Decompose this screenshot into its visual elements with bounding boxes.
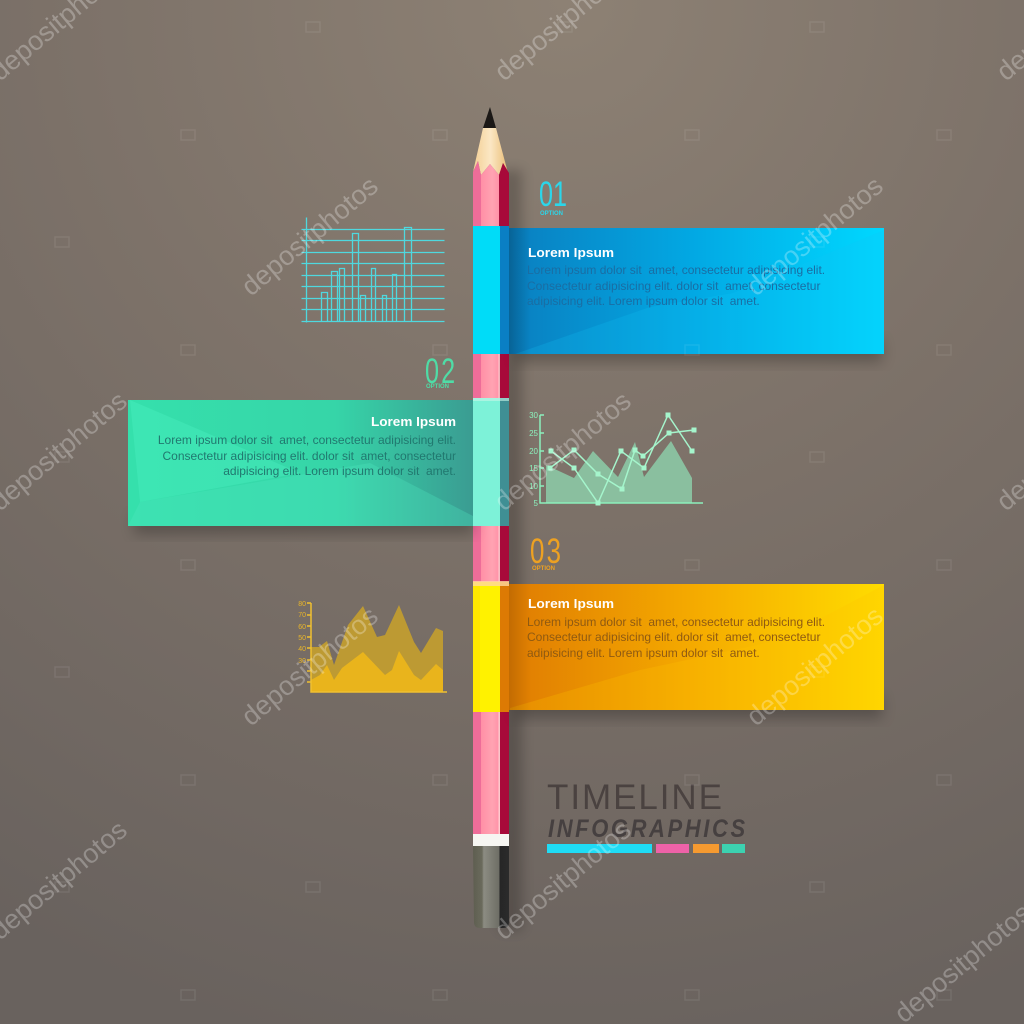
title line 2: INFOGRAPHICS — [548, 815, 745, 842]
line chart axis labels: 10 — [529, 482, 539, 491]
teal body text: Consectetur adipisicing elit. dolor sit amet, consectetur — [163, 449, 456, 463]
yellow band on pencil — [473, 581, 509, 712]
area chart axis labels: 70 — [298, 612, 306, 619]
orange body text — [527, 615, 825, 660]
line chart — [529, 411, 703, 508]
panel: teal — [128, 398, 509, 534]
option 02: 02 — [425, 352, 457, 391]
area chart axis labels: 50 — [298, 635, 306, 642]
bar chart — [302, 218, 444, 322]
line chart axis labels: 30 — [529, 411, 539, 420]
pencil eraser end — [473, 846, 509, 928]
area chart axis labels — [298, 601, 306, 665]
option 03: OPTION — [532, 566, 555, 572]
panel: orange — [473, 581, 884, 718]
area chart axis labels: 60 — [298, 624, 306, 631]
orange body text: Lorem ipsum dolor sit amet, consectetur adipisicing elit. — [527, 615, 825, 629]
teal body text: adipisicing elit. Lorem ipsum dolor sit amet. — [223, 464, 456, 478]
title colour bars — [547, 844, 745, 853]
teal heading: Lorem Ipsum — [371, 414, 456, 429]
line chart axis labels — [529, 411, 539, 508]
area chart axis labels: 40 — [298, 646, 306, 653]
pencil wood — [473, 128, 508, 175]
line chart axis labels: 25 — [529, 429, 539, 438]
blue band on pencil — [473, 226, 509, 354]
orange body text: Consectetur adipisicing elit. dolor sit amet, consectetur — [527, 630, 820, 644]
blue body text: Consectetur adipisicing elit. dolor sit amet, consectetur — [527, 279, 820, 293]
option 01: 01 — [539, 175, 567, 214]
orange heading: Lorem Ipsum — [528, 596, 614, 611]
watermarks: depositphotos — [741, 601, 889, 732]
pencil white ferrule — [473, 834, 509, 846]
orange body text: adipisicing elit. Lorem ipsum dolor sit amet. — [527, 646, 760, 660]
line chart axis labels: 15 — [529, 464, 539, 473]
pencil body — [473, 161, 509, 834]
option 02: OPTION — [426, 384, 449, 390]
watermarks: depositphotos — [741, 171, 889, 302]
watermarks: depositphotos — [489, 815, 637, 946]
area chart axis labels: 80 — [298, 601, 306, 608]
area chart — [298, 601, 447, 692]
option 01: OPTION — [540, 211, 563, 217]
blue body text: adipisicing elit. Lorem ipsum dolor sit amet. — [527, 294, 760, 308]
title line 1: TIMELINE — [547, 778, 722, 817]
blue body text: Lorem ipsum dolor sit amet, consectetur adipisicing elit. — [527, 263, 825, 277]
pencil shadow — [500, 170, 522, 930]
watermarks: depositphotos — [489, 386, 637, 517]
watermarks: depositphotos — [236, 601, 384, 732]
pencil tip — [483, 107, 496, 128]
teal body text: Lorem ipsum dolor sit amet, consectetur adipisicing elit. — [158, 433, 456, 447]
option 03: 03 — [530, 531, 563, 571]
blue body text — [527, 263, 825, 308]
teal body text — [158, 433, 456, 478]
line chart axis labels: 20 — [529, 447, 539, 456]
title — [547, 778, 745, 853]
blue heading: Lorem Ipsum — [528, 245, 614, 260]
line chart axis labels: 5 — [534, 499, 539, 508]
panel: blue — [473, 226, 884, 362]
pencil — [473, 107, 509, 928]
watermarks: depositphotos — [236, 171, 384, 302]
area chart axis labels: 30 — [298, 658, 306, 665]
teal band on pencil — [473, 398, 509, 526]
